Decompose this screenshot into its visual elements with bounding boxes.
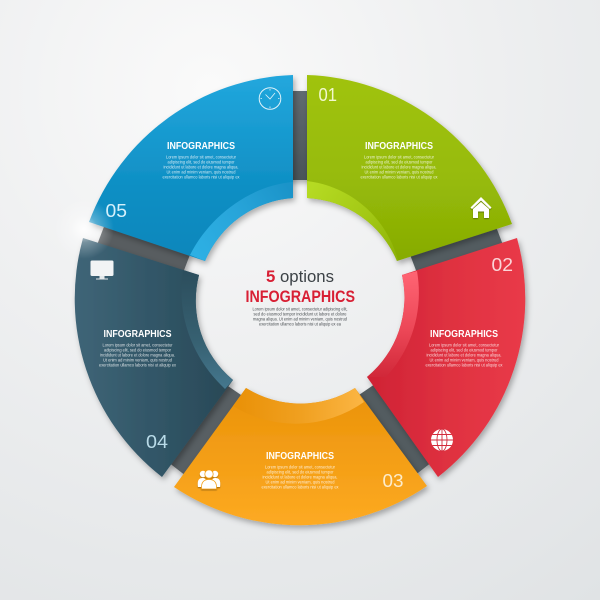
- body text: exercitation ullamco laboris nisi ut aliquip ex: [99, 362, 177, 368]
- body text: exercitation ullamco laboris nisi ut aliquip ex: [426, 362, 503, 368]
- body text: incididunt ut labore et dolore magna aliqua.: [262, 474, 338, 480]
- body text: exercitation ullamco laboris nisi ut aliquip ex: [360, 174, 438, 180]
- heading: 5 options: 5 options: [266, 268, 334, 286]
- centre title: [246, 268, 355, 326]
- centre body text: sed do eiusmod tempor incididunt ut labore et dolore: [254, 312, 347, 316]
- inner highlight band: [181, 270, 233, 389]
- body text: adipiscing elit, sed do eiusmod tempor: [366, 160, 433, 164]
- icon: globe: [431, 429, 453, 451]
- segment shape: [367, 238, 525, 477]
- heading: INFOGRAPHICS: [430, 328, 498, 340]
- body text: [426, 342, 503, 368]
- grey connectors between segments: [97, 91, 503, 476]
- segment shape: [89, 75, 293, 261]
- body text: adipiscing elit, sed do eiusmod tempor: [266, 470, 334, 474]
- panel: segment 03 orange: [174, 388, 427, 525]
- inner highlight band: [233, 388, 364, 424]
- body text: [162, 154, 240, 180]
- body text: incididunt ut labore et dolore magna aliqua.: [362, 164, 436, 170]
- body text: [262, 464, 339, 490]
- highlight glare: [54, 199, 114, 259]
- panel: segment 02 red: [367, 238, 525, 477]
- centre body text: [252, 306, 348, 326]
- panel: segment 01 green: [307, 75, 512, 261]
- body text: incididunt ut labore et dolore magna aliqua.: [426, 352, 502, 358]
- centre body text: Lorem ipsum dolor sit amet, consectetur adipiscing elit,: [252, 306, 348, 312]
- heading: INFOGRAPHICS: [167, 140, 235, 152]
- panel: segment 05 blue: [54, 75, 293, 261]
- body text: Ut enim ad minim veniam, quis nostrud: [103, 358, 172, 362]
- body text: Lorem ipsum dolor sit amet, consectetur: [102, 342, 173, 348]
- number 03: 03: [382, 471, 404, 491]
- body text: incididunt ut labore et dolore magna aliqua.: [164, 164, 238, 170]
- heading: INFOGRAPHICS: [104, 328, 172, 340]
- heading: INFOGRAPHICS: INFOGRAPHICS: [246, 288, 355, 306]
- number 04: 04: [146, 432, 168, 452]
- body text: Ut enim ad minim veniam, quis nostrud: [266, 480, 335, 484]
- segment shape: [174, 388, 427, 525]
- body text: Ut enim ad minim veniam, quis nostrud: [364, 170, 434, 174]
- body text: Ut enim ad minim veniam, quis nostrud: [430, 358, 499, 362]
- body text: Lorem ipsum dolor sit amet, consectetur: [166, 154, 236, 160]
- centre body text: magna aliqua. Ut enim ad minim veniam, quis nostrud: [253, 316, 347, 322]
- icon: clock: [259, 88, 281, 109]
- icon: house: [470, 197, 492, 218]
- inner highlight band: [307, 181, 398, 261]
- segment shape: [307, 75, 512, 261]
- body text: Ut enim ad minim veniam, quis nostrud: [166, 170, 236, 174]
- heading: INFOGRAPHICS: [365, 140, 433, 152]
- number 05: 05: [106, 201, 127, 221]
- number 01: 01: [318, 85, 337, 105]
- body text: adipiscing elit, sed do eiusmod tempor: [104, 348, 171, 352]
- body text: exercitation ullamco laboris nisi ut aliquip ex: [262, 484, 339, 490]
- icon: monitor: [90, 260, 114, 280]
- body text: adipiscing elit, sed do eiusmod tempor: [168, 160, 235, 164]
- icon: people: [198, 470, 220, 489]
- centre body text: exercitation ullamco laboris nisi ut aliquip ex ea: [259, 322, 341, 326]
- inner highlight band: [367, 271, 419, 377]
- inner highlight band: [190, 182, 293, 261]
- number 02: 02: [492, 255, 513, 275]
- body text: exercitation ullamco laboris nisi ut aliquip ex: [162, 174, 240, 180]
- body text: Lorem ipsum dolor sit amet, consectetur: [429, 342, 499, 348]
- body text: incididunt ut labore et dolore magna aliqua.: [100, 352, 175, 358]
- body text: adipiscing elit, sed do eiusmod tempor: [430, 348, 498, 352]
- body text: Lorem ipsum dolor sit amet, consectetur: [265, 464, 335, 470]
- panel: segment 04 dark teal: [75, 238, 233, 477]
- body text: [99, 342, 177, 368]
- heading: INFOGRAPHICS: [266, 450, 334, 462]
- body text: [360, 154, 438, 180]
- body text: Lorem ipsum dolor sit amet, consectetur: [364, 154, 434, 160]
- segment shape: [75, 238, 233, 477]
